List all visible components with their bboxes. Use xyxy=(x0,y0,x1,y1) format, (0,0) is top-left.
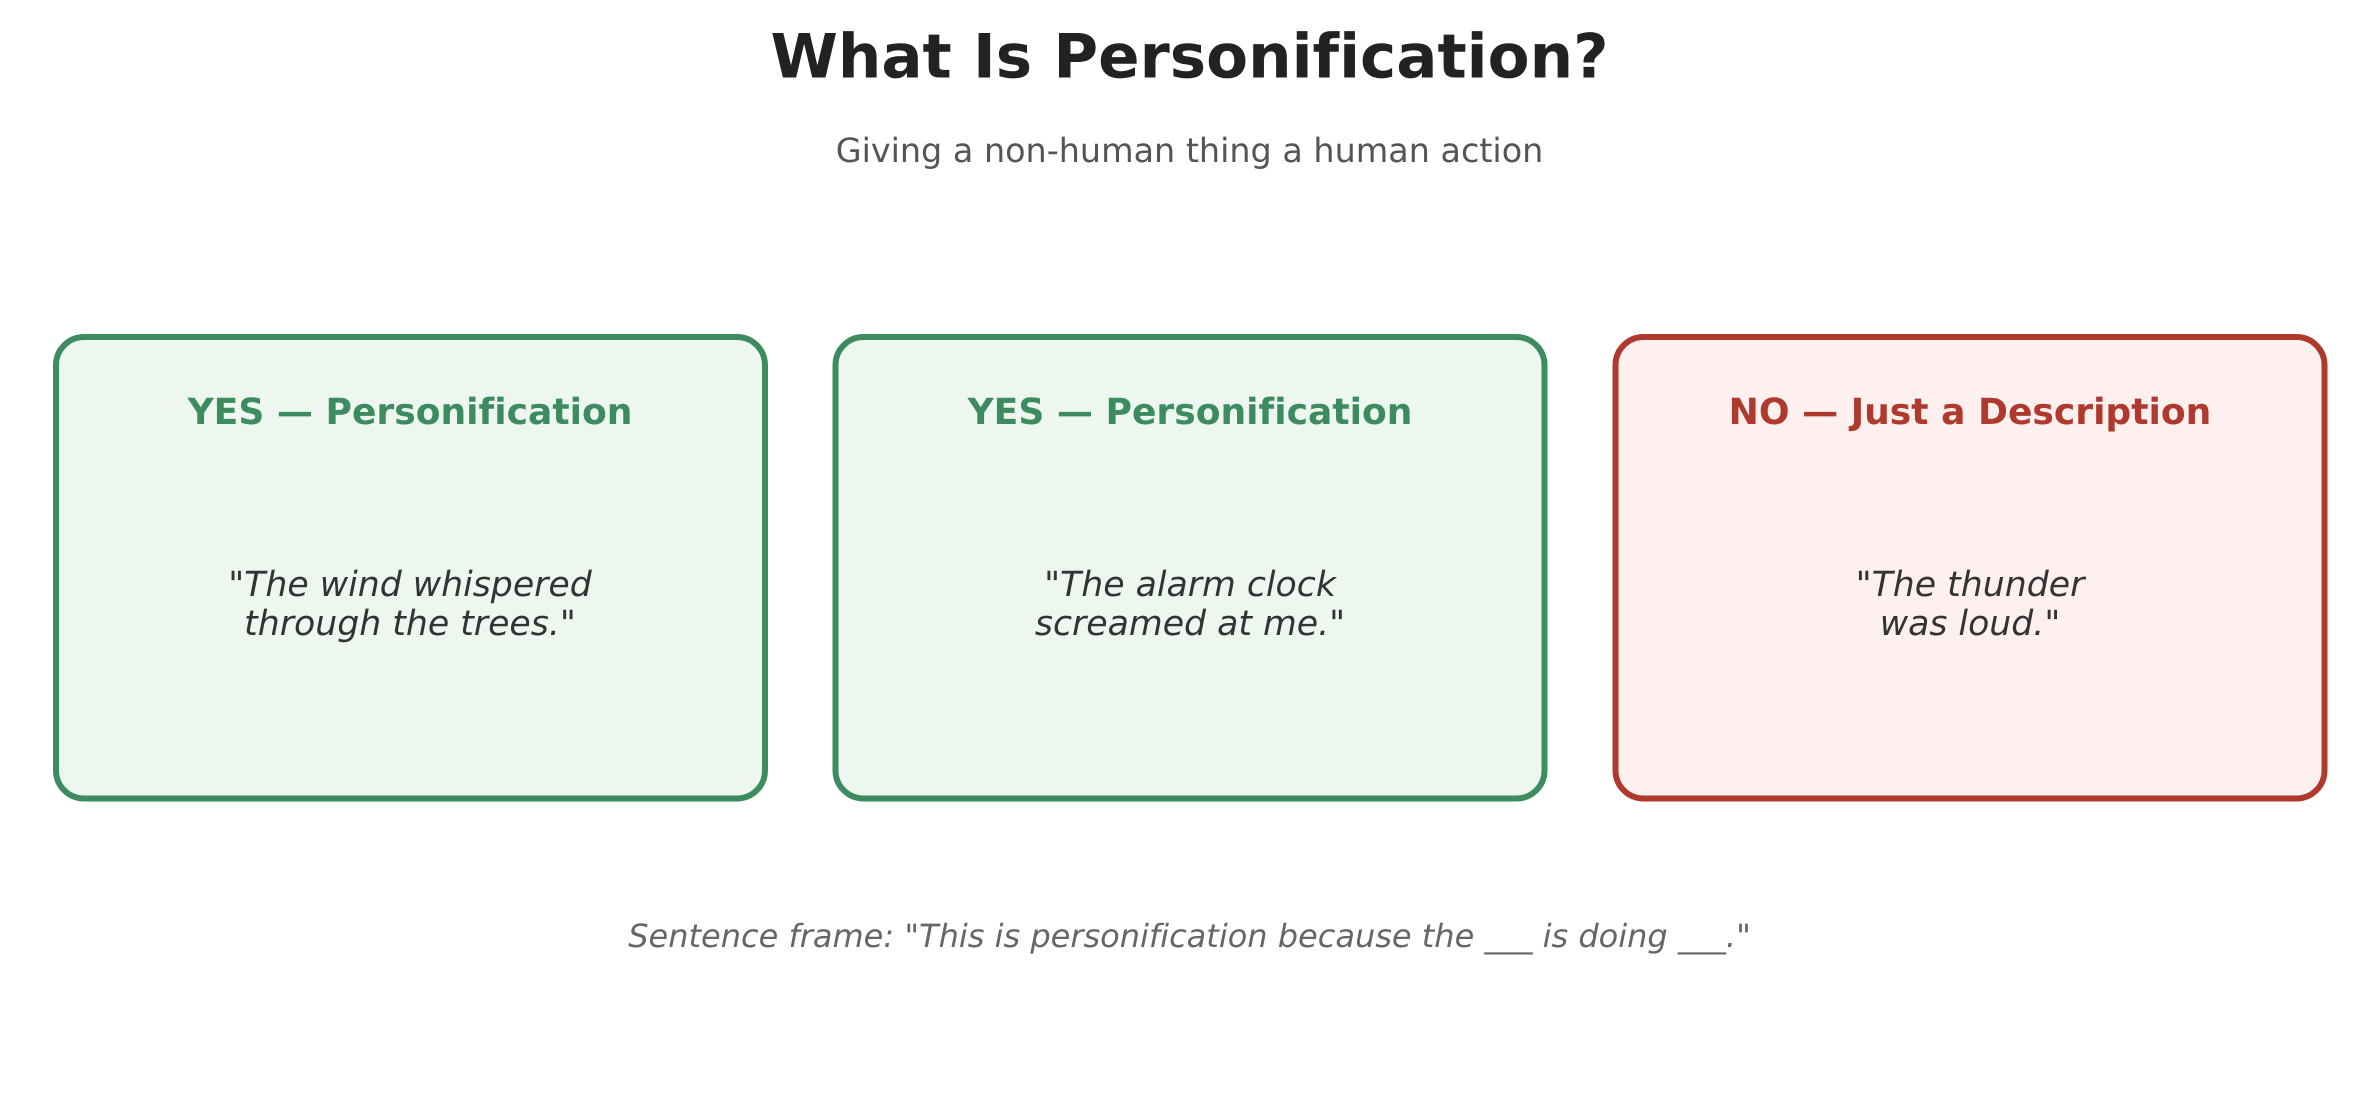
panel: yes example, wind xyxy=(56,337,765,798)
sentence frame: Sentence frame: "This is personification because the ___ is doing ___." xyxy=(628,917,1751,955)
example quote: through the trees." xyxy=(244,604,576,644)
panel: no example, thunder xyxy=(1616,337,2324,798)
card background xyxy=(836,337,1544,798)
example quote: was loud." xyxy=(1880,604,2060,644)
subtitle: Giving a non-human thing a human action xyxy=(836,131,1543,170)
example quote: "The alarm clock xyxy=(1044,565,1338,605)
card background xyxy=(56,337,765,798)
card heading: YES — Personification xyxy=(967,391,1412,433)
example quote: screamed at me." xyxy=(1035,604,1345,644)
card background xyxy=(1616,337,2324,798)
example quote: "The wind whispered xyxy=(228,565,593,605)
card heading: YES — Personification xyxy=(187,391,632,433)
example quote: "The thunder xyxy=(1856,565,2087,605)
title: What Is Personification? xyxy=(770,22,1609,92)
card heading: NO — Just a Description xyxy=(1729,391,2211,433)
panel: yes example, alarm clock xyxy=(836,337,1544,798)
